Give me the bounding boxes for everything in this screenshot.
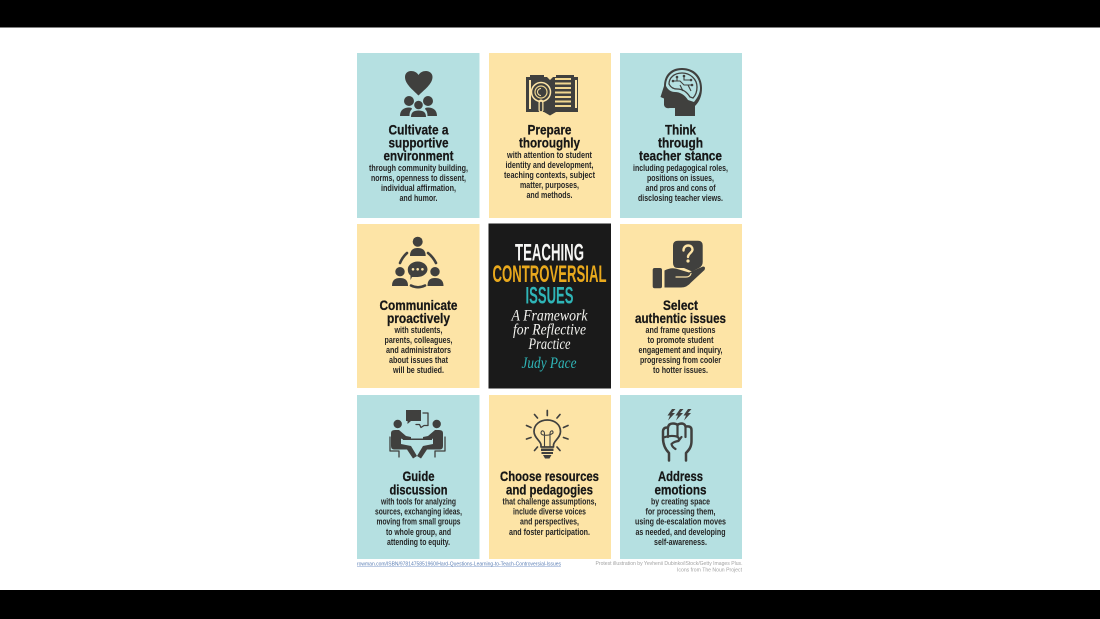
bottom black band [0, 590, 1100, 619]
body text: about issues that [389, 355, 448, 365]
icon: open book with magnifying glass [526, 75, 578, 116]
body text: matter, purposes, [520, 180, 579, 190]
heading: Select [663, 298, 698, 313]
body text: and methods. [526, 190, 572, 200]
body text: moving from small groups [376, 517, 461, 527]
heading: Think [665, 122, 696, 138]
body text: individual affirmation, [381, 183, 456, 193]
body text [635, 496, 726, 547]
body text [633, 163, 728, 203]
body text: by creating space [651, 496, 710, 506]
heading [390, 469, 448, 497]
body text: with students, [394, 325, 442, 335]
body text [638, 325, 722, 375]
book title: ISSUES [526, 282, 574, 309]
source link: rowman.com/ISBN/9781475851960/Hard-Questions-Learning-to-Teach-Controversial-Issues [357, 562, 561, 568]
body text: will be studied. [392, 365, 444, 375]
book author: Judy Pace [522, 355, 577, 372]
body text: to promote student [648, 335, 714, 345]
heading: Cultivate a [388, 122, 449, 138]
body text [369, 163, 468, 203]
icon: three people with speech bubble [392, 237, 444, 287]
body text: and pros and cons of [646, 183, 716, 193]
heading [519, 122, 580, 150]
body text: norms, openness to dissent, [371, 173, 466, 183]
image credits: Protest illustration by Yevhenii Dubinko/iStock/Getty Images Plus. [596, 561, 742, 567]
body text [504, 150, 595, 200]
icon: head with circuit brain [660, 68, 702, 116]
panel: prepare thoroughly [489, 53, 611, 218]
heading: Communicate [380, 298, 458, 313]
heading: Choose resources [500, 469, 599, 484]
heading: Address [658, 469, 703, 484]
panel: choose resources and pedagogies [489, 395, 611, 559]
body text: and humor. [400, 193, 438, 203]
panel: communicate proactively [357, 224, 480, 388]
heading: discussion [390, 482, 448, 497]
body text: disclosing teacher views. [638, 193, 723, 203]
body text: and frame questions [646, 325, 716, 335]
heading: authentic issues [635, 311, 726, 326]
heading: teacher stance [639, 149, 722, 164]
body text: self-awareness. [654, 537, 707, 547]
heading [384, 122, 454, 164]
top black band [0, 0, 1100, 28]
book title: CONTROVERSIAL [492, 261, 606, 288]
image credits [596, 561, 743, 574]
body text: progressing from cooler [640, 355, 721, 365]
panel: book cover [488, 224, 611, 388]
icon: two people talking at a table [390, 410, 445, 458]
body text: sources, exchanging ideas, [375, 506, 462, 516]
icon: raised fist with lightning [663, 409, 692, 460]
heading [500, 469, 599, 497]
panel: address emotions [620, 395, 742, 559]
heading: and pedagogies [506, 482, 593, 497]
body text: as needed, and developing [636, 527, 726, 537]
body text: include diverse voices [513, 506, 586, 516]
panel: think through teacher stance [620, 53, 742, 218]
panel: cultivate a supportive environment [357, 53, 480, 218]
body text: with attention to student [506, 150, 592, 160]
icon: hand holding question mark [653, 241, 705, 288]
book subtitle: A Framework [511, 308, 588, 325]
panel: guide discussion [357, 395, 480, 559]
book subtitle: Practice [528, 336, 571, 353]
body text [384, 325, 452, 375]
body text: parents, colleagues, [384, 335, 452, 345]
body text: engagement and inquiry, [638, 345, 722, 355]
body text [375, 496, 462, 547]
panel: select authentic issues [620, 224, 742, 388]
image credits: Icons from The Noun Project [677, 568, 743, 574]
heading: Prepare [528, 122, 572, 138]
body text: identity and development, [506, 160, 594, 170]
book subtitle: for Reflective [513, 322, 586, 338]
body text: for processing them, [646, 506, 716, 516]
body text: and perspectives, [520, 517, 579, 527]
heading: through [658, 136, 703, 150]
heading: emotions [654, 482, 707, 497]
heading: thoroughly [519, 136, 580, 150]
body text: positions on issues, [647, 173, 714, 183]
heading: Guide [402, 469, 435, 484]
heading [639, 122, 722, 164]
heading: proactively [387, 311, 450, 326]
heading [654, 469, 707, 497]
book title: TEACHING [515, 240, 584, 267]
body text: through community building, [369, 163, 468, 173]
body text [502, 496, 596, 537]
body text: to hotter issues. [653, 365, 708, 375]
book subtitle [511, 308, 588, 353]
book title [492, 240, 606, 309]
body text: teaching contexts, subject [504, 170, 595, 180]
body text: with tools for analyzing [380, 496, 456, 506]
body text: using de-escalation moves [635, 517, 726, 527]
heading [380, 298, 458, 326]
body text: that challenge assumptions, [502, 496, 596, 506]
icon: heart above group of people [400, 71, 437, 117]
body text: to whole group, and [386, 527, 451, 537]
heading: supportive [388, 136, 449, 150]
heading: environment [384, 149, 454, 164]
body text: and foster participation. [509, 527, 590, 537]
body text: including pedagogical roles, [633, 163, 728, 173]
body text: attending to equity. [387, 537, 450, 547]
heading [635, 298, 726, 326]
icon: light bulb with rays [526, 410, 568, 458]
body text: and administrators [386, 345, 451, 355]
